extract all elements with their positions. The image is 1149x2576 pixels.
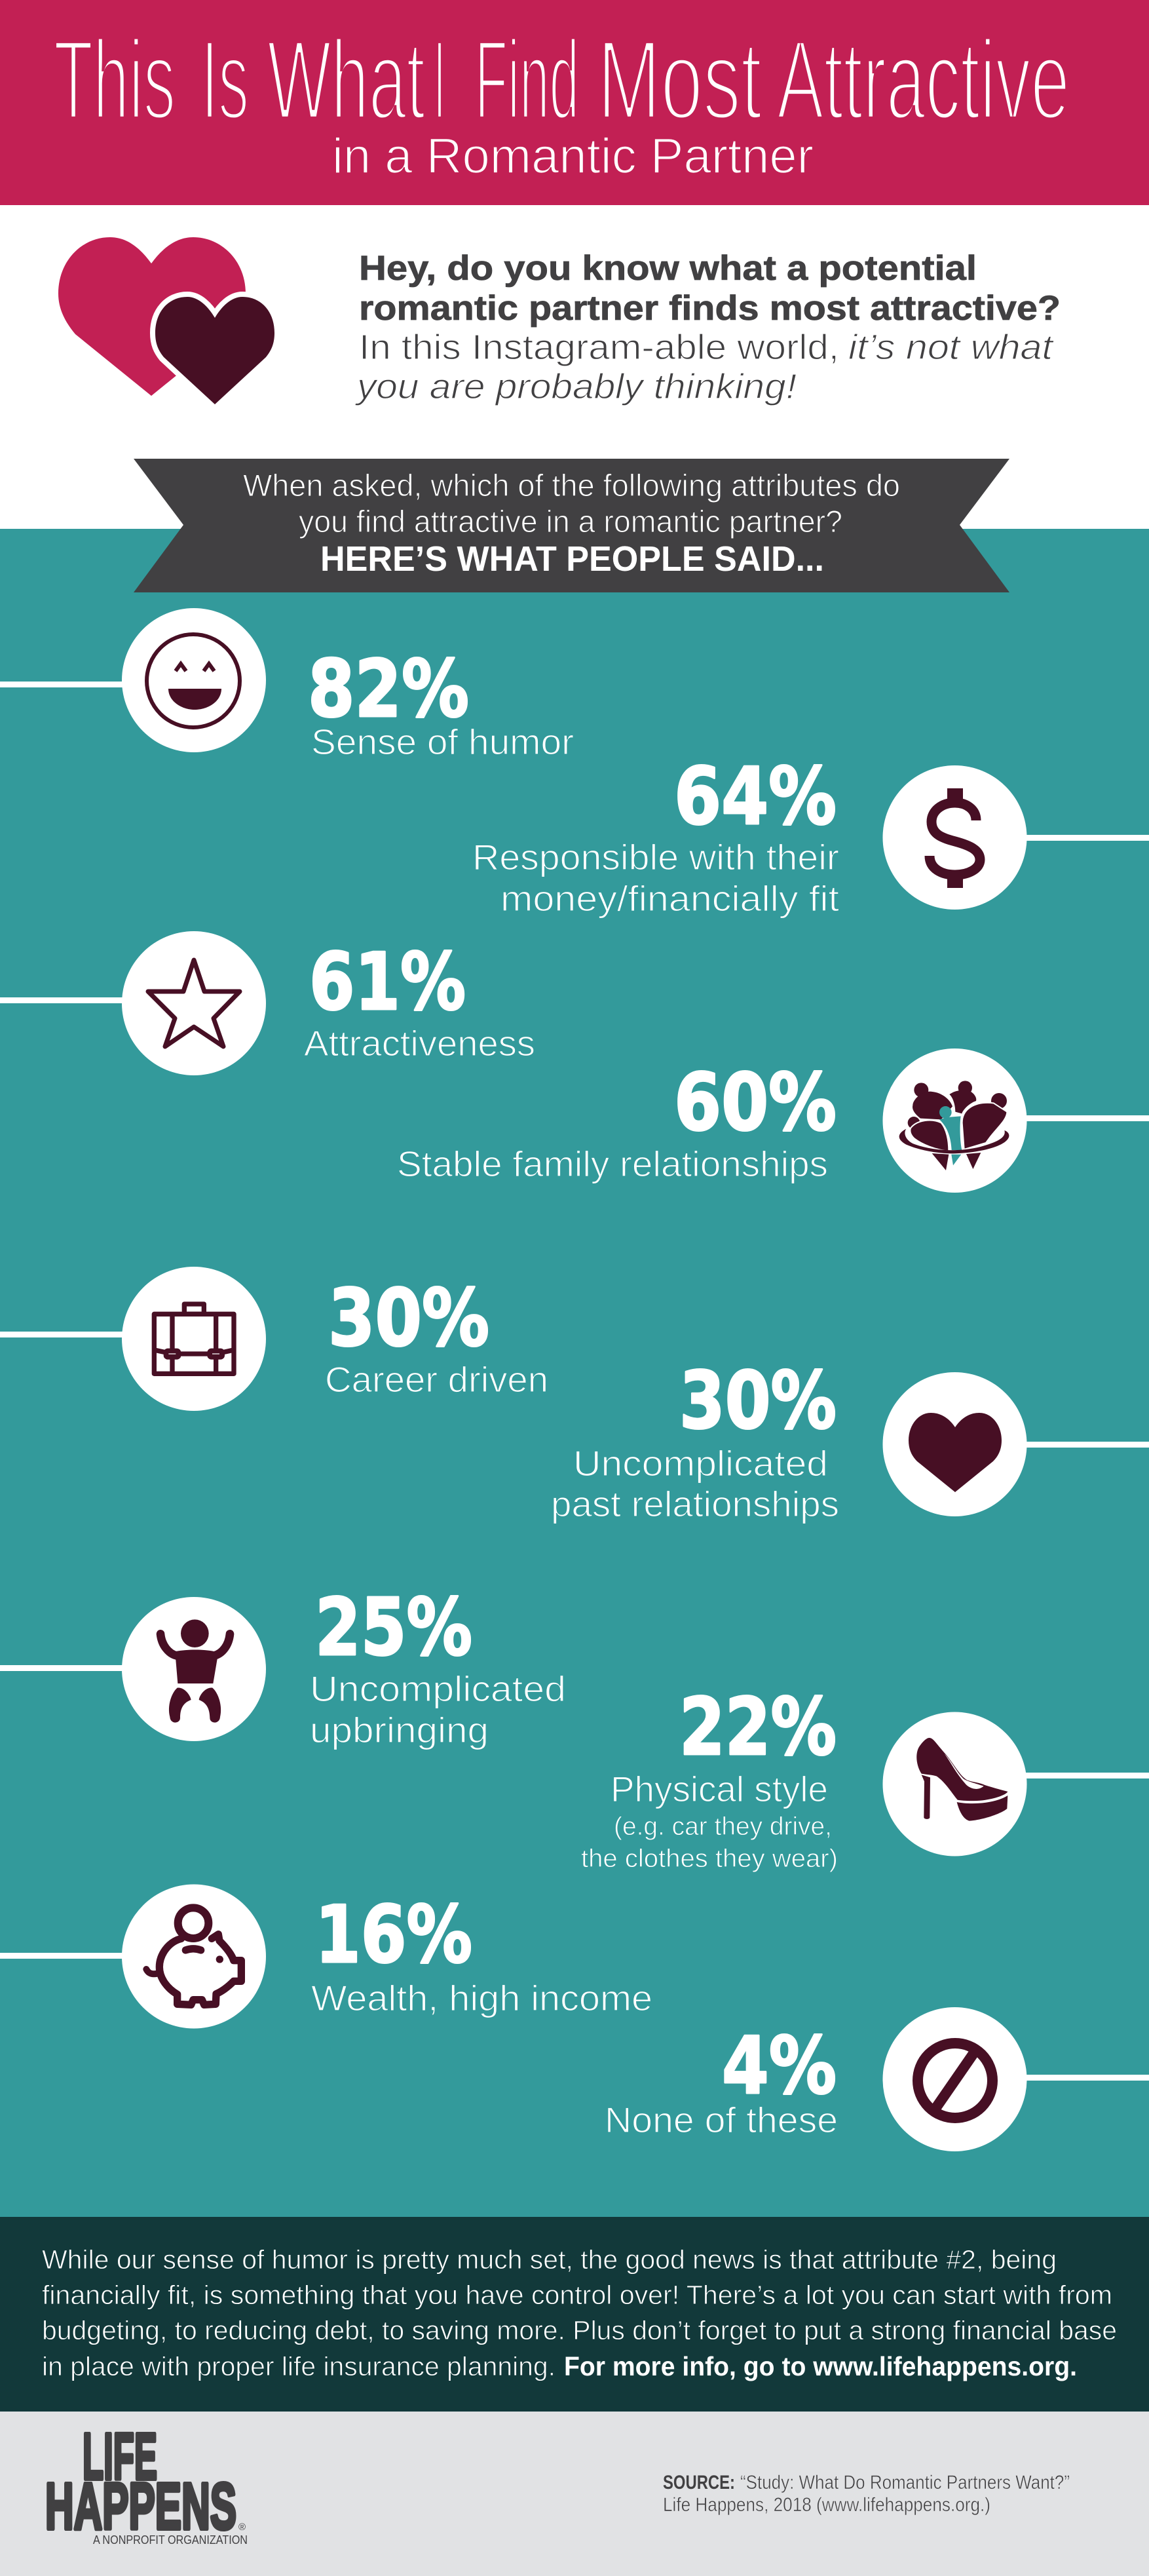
- panel: closing message: in place with proper life insurance planning.: [42, 2351, 556, 2381]
- title: Find: [475, 17, 579, 143]
- icon: heart: [909, 1413, 1002, 1492]
- logo: Life Happens: HAPPENS: [45, 2470, 236, 2543]
- label: [310, 1668, 566, 1750]
- icon: dollar sign: [930, 788, 980, 888]
- item: career driven: [0, 1267, 548, 1411]
- intro text block: it’s not what: [848, 328, 1054, 367]
- title: This: [54, 17, 176, 143]
- stat: 25%: [315, 1583, 472, 1674]
- title: Most: [597, 17, 762, 143]
- label: money/financially fit: [500, 878, 839, 919]
- item: wealth: [0, 1885, 652, 2029]
- logo: Life Happens: [45, 2420, 248, 2547]
- header panel: [0, 0, 1149, 205]
- icon: laughing face: [147, 634, 240, 727]
- item: stable family relationships: [397, 1048, 1149, 1193]
- label: the clothes they wear): [581, 1845, 838, 1873]
- source citation: [663, 2472, 1070, 2516]
- item: financially responsible: [472, 752, 1149, 919]
- icon: briefcase: [154, 1304, 234, 1374]
- intro text block: Hey, do you know what a potential: [359, 249, 977, 288]
- icon: high heel shoe: [916, 1738, 1008, 1821]
- stat: 60%: [674, 1058, 837, 1149]
- title: I: [434, 17, 445, 143]
- label: Stable family relationships: [397, 1144, 828, 1184]
- stat: 22%: [679, 1682, 837, 1773]
- label: Uncomplicated: [310, 1668, 566, 1709]
- banner: question: [134, 459, 1009, 592]
- label: [581, 1769, 838, 1873]
- stat: 16%: [315, 1890, 472, 1981]
- title: Is: [201, 17, 249, 143]
- intro text block: [354, 249, 1061, 406]
- icon: prohibited sign: [918, 2043, 992, 2118]
- label: Career driven: [325, 1359, 548, 1400]
- label: (e.g. car they drive,: [614, 1813, 832, 1841]
- stat: 4%: [722, 2021, 837, 2112]
- stat: 30%: [328, 1273, 489, 1364]
- icon: family group: [899, 1081, 1009, 1170]
- intro text block: romantic partner finds most attractive?: [359, 289, 1061, 328]
- logo: Life Happens: LIFE: [83, 2420, 157, 2493]
- logo: Life Happens: A NONPROFIT ORGANIZATION: [93, 2533, 248, 2547]
- source citation: Life Happens, 2018 (www.lifehappens.org.): [663, 2494, 990, 2516]
- item: sense of humor: [0, 608, 574, 762]
- logo: Life Happens: ®: [238, 2522, 246, 2533]
- banner: question: When asked, which of the following attributes do: [243, 468, 900, 503]
- stat: 61%: [309, 937, 466, 1028]
- icon: baby: [160, 1619, 230, 1723]
- title: [54, 17, 1070, 143]
- panel: closing message: financially fit, is something that you have control over! There’s a lot you can start with from: [42, 2280, 1112, 2310]
- intro text block: In this Instagram-able world,: [359, 328, 839, 367]
- label: Wealth, high income: [311, 1978, 652, 2018]
- stat: 82%: [308, 644, 469, 735]
- teal background panel: [0, 529, 1149, 2217]
- panel: closing message: While our sense of humor is pretty much set, the good news is that attribute #2, being: [42, 2244, 1057, 2275]
- icon: two hearts: [58, 237, 274, 404]
- subtitle: in a Romantic Partner: [332, 128, 814, 184]
- panel: closing message: budgeting, to reducing debt, to saving more. Plus don’t forget to put a strong financial base: [42, 2315, 1117, 2345]
- title: What: [267, 17, 425, 143]
- label: Attractiveness: [304, 1023, 535, 1064]
- intro text block: you are probably thinking!: [354, 367, 797, 406]
- panel: closing message: [0, 2217, 1149, 2412]
- label: upbringing: [310, 1710, 489, 1750]
- item: uncomplicated past relationships: [551, 1356, 1149, 1524]
- label: [472, 837, 839, 919]
- stat: 64%: [674, 752, 837, 843]
- panel: footer: [0, 2412, 1149, 2576]
- banner: question: HERE’S WHAT PEOPLE SAID...: [320, 539, 824, 579]
- label: Uncomplicated: [573, 1443, 828, 1484]
- label: Physical style: [611, 1769, 828, 1809]
- label: Sense of humor: [311, 721, 574, 762]
- item: none of these: [605, 2007, 1149, 2151]
- label: past relationships: [551, 1484, 839, 1524]
- banner: question: you find attractive in a romantic partner?: [299, 504, 842, 539]
- stat: 30%: [679, 1356, 837, 1447]
- item: attractiveness: [0, 931, 535, 1075]
- source citation: “Study: What Do Romantic Partners Want?”: [740, 2472, 1070, 2493]
- item: uncomplicated upbringing: [0, 1583, 566, 1750]
- label: [551, 1443, 839, 1524]
- icon: piggy bank: [146, 1908, 241, 2005]
- panel: closing message: For more info, go to www.lifehappens.org.: [564, 2351, 1077, 2381]
- label: None of these: [605, 2100, 838, 2140]
- icon: star: [148, 960, 240, 1047]
- label: Responsible with their: [472, 837, 839, 877]
- source citation: SOURCE:: [663, 2472, 735, 2493]
- item: physical style: [581, 1682, 1149, 1873]
